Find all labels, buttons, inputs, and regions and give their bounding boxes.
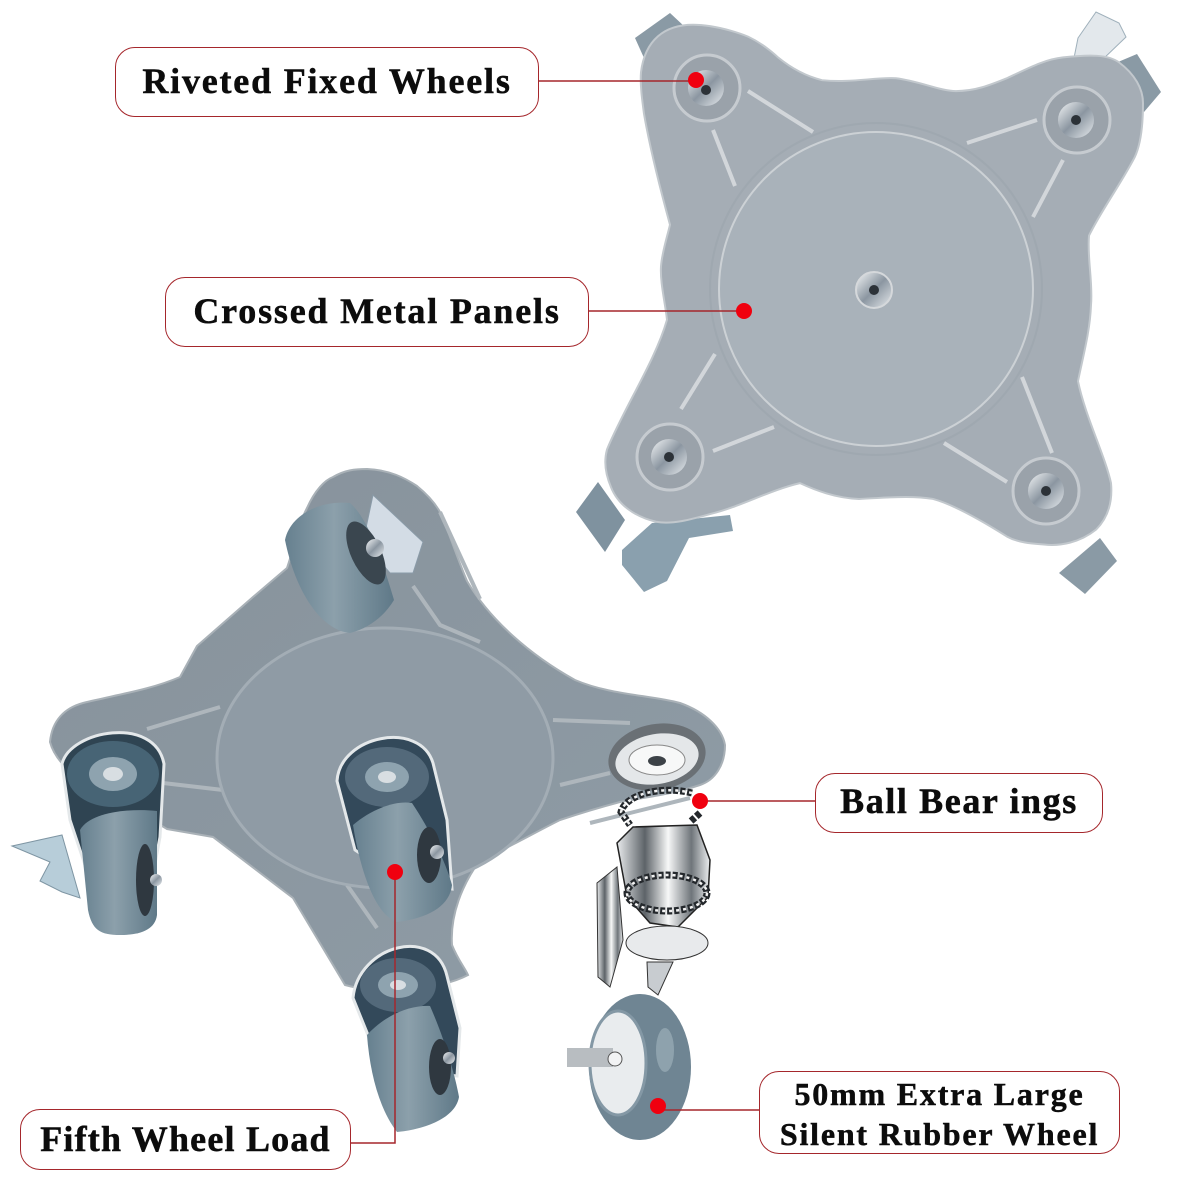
wheel axle [567,1048,622,1067]
angled plate disc [217,628,553,888]
caster: left [12,733,164,935]
leader lines [350,81,815,1143]
panel: top view of dolly plate [576,12,1161,594]
callout: fifth wheel load: Fifth Wheel Load [40,1119,331,1159]
caster fork leg right [647,962,673,995]
top plate central disc [710,123,1042,455]
panel: angled view of dolly with wheels [12,469,725,1132]
lower bearing race [626,926,708,960]
top plate rivets [637,55,1110,524]
callout: riveted fixed wheels: Riveted Fixed Wheels [142,61,512,101]
callout: riveted fixed wheels [115,47,539,117]
callout: ball bearings [815,773,1103,833]
callout: fifth wheel load [20,1109,351,1170]
angled plate ribs [147,512,690,928]
rubber wheel [589,994,691,1140]
callout: rubber wheel [759,1071,1120,1154]
top plate peeking wheels and brakes [576,12,1161,594]
caster: top [285,495,423,633]
callout: ball bearings: Ball Bear ings [840,781,1078,821]
caster: bottom [353,946,460,1132]
callout: rubber wheel: Silent Rubber Wheel [780,1116,1099,1152]
angled plate body [50,469,725,990]
callout: crossed metal panels: Crossed Metal Panels [193,291,561,331]
top plate body [605,25,1143,545]
caster: centre [337,737,452,922]
callout: rubber wheel: 50mm Extra Large [794,1076,1085,1112]
caster fork cup [617,825,710,927]
caster fork leg left [597,867,623,987]
top plate ribs [681,91,1063,482]
ball bearing chains [621,790,707,911]
panel: exploded caster parts [567,716,711,1140]
callout: crossed metal panels [165,277,589,347]
ball bearing race top [603,716,711,798]
marker dots [387,72,752,1114]
